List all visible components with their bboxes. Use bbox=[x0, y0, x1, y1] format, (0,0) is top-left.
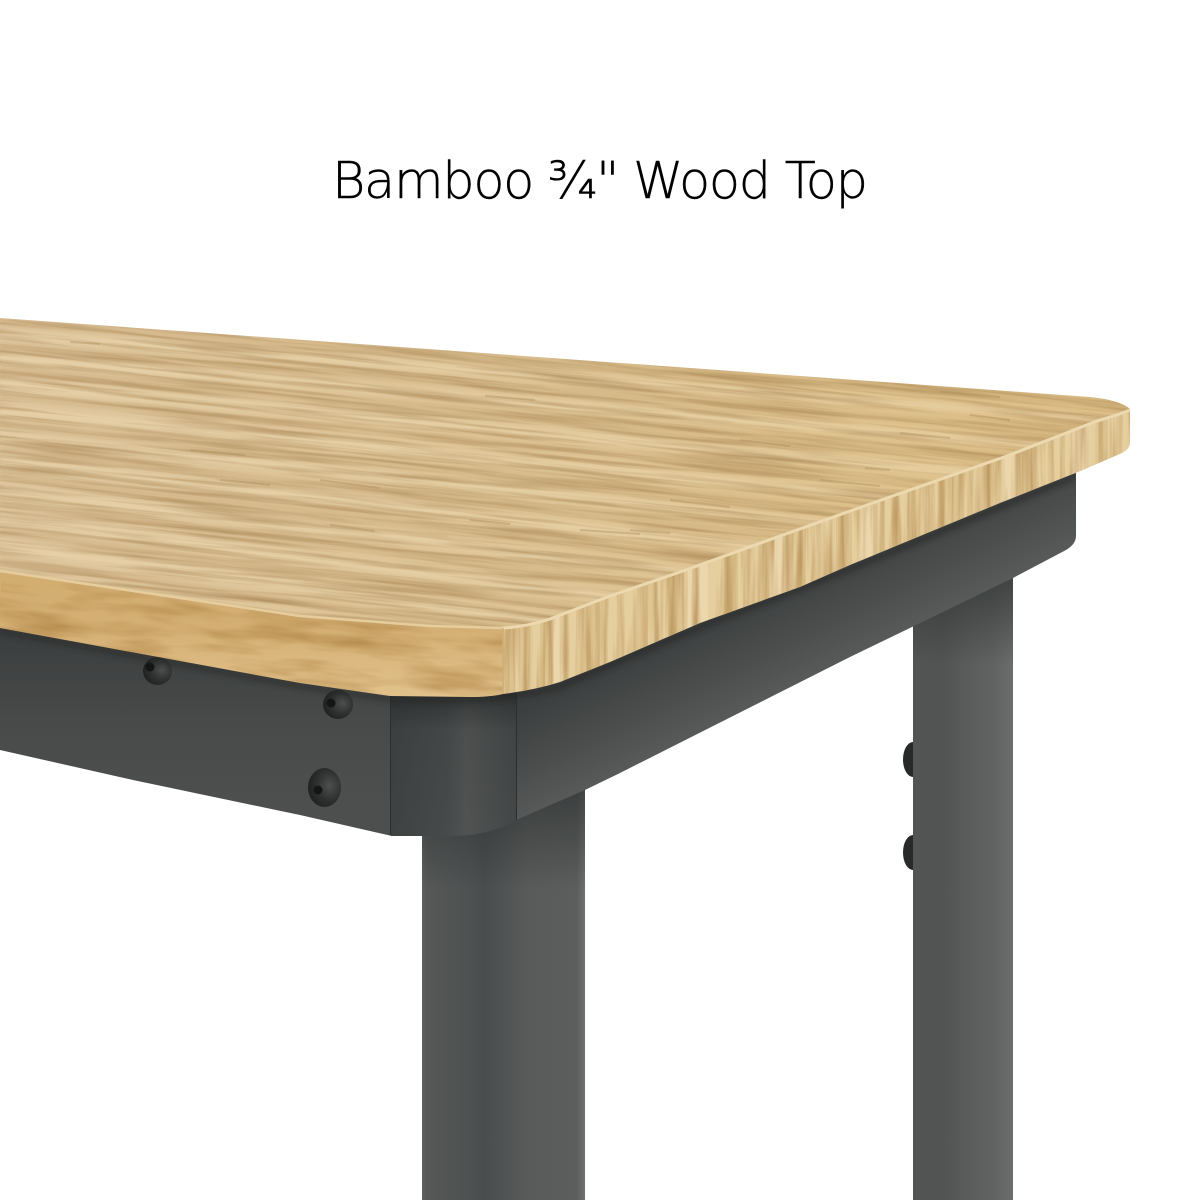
apron right side bbox=[516, 470, 1076, 820]
front leg bbox=[422, 785, 585, 1200]
table top left edge bbox=[0, 570, 503, 697]
left edge grain bbox=[0, 584, 502, 697]
apron left side bbox=[0, 620, 392, 836]
surface knots and streaks bbox=[70, 342, 1010, 534]
right edge highlight bbox=[503, 410, 1130, 628]
left edge highlight bbox=[0, 571, 503, 628]
bolt 3 bbox=[308, 768, 341, 807]
apron corner bracket bbox=[390, 685, 516, 836]
surface tonal bands bbox=[0, 318, 1128, 626]
surface fine grain bbox=[0, 320, 1130, 627]
wood shadow on apron bbox=[0, 472, 1076, 703]
table top surface bbox=[0, 318, 1130, 627]
apron bolts bbox=[143, 657, 353, 807]
bolt 1 bbox=[143, 657, 172, 685]
title: Bamboo ¾" Wood Top bbox=[332, 152, 868, 211]
bolt 2 bbox=[323, 690, 353, 719]
corner seam bbox=[502, 628, 504, 694]
bamboo strips bbox=[504, 409, 1130, 694]
table top right edge bbox=[502, 408, 1130, 694]
back leg bolts bbox=[903, 742, 923, 870]
back leg bbox=[903, 575, 1013, 1200]
